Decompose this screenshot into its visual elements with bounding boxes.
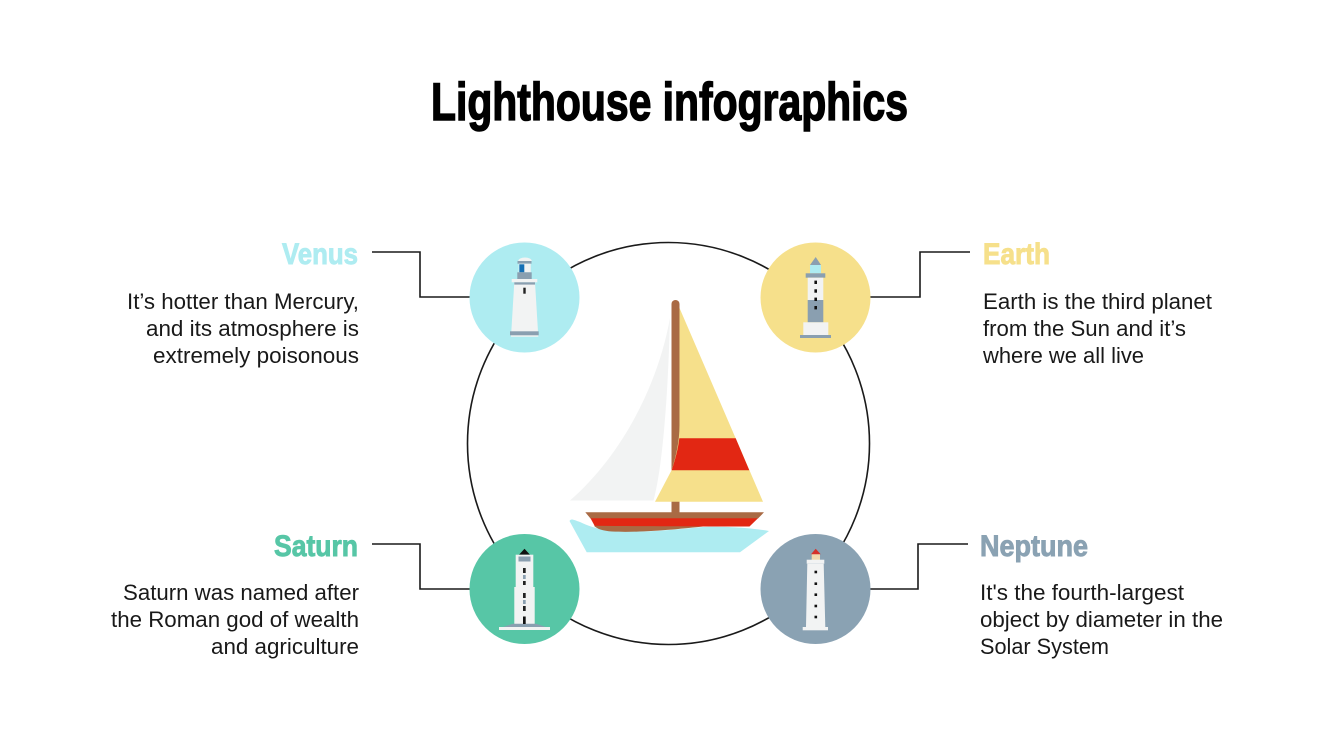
text block: Earth: from the Sun and it’s [983,316,1186,341]
text block: Neptune: Neptune [980,530,1088,563]
icon: Venus lighthouse [470,242,580,352]
connector: Venus [372,252,470,297]
text block: Saturn: Saturn [274,530,358,563]
text block: Neptune: object by diameter in the [980,607,1223,632]
mast [672,300,680,513]
connector: Earth [870,252,970,297]
red sail band [672,438,749,470]
title: Lighthouse infographics [431,73,908,132]
water [570,519,769,552]
text block: Earth: Earth [983,238,1050,271]
white sail [570,318,670,500]
yellow sail [655,308,763,502]
text block: Saturn: and agriculture [211,634,359,659]
icon: Earth lighthouse [760,242,870,352]
text block: Neptune [980,530,1223,659]
central ring [468,242,870,644]
hull [585,512,764,518]
icon: Saturn lighthouse [470,534,580,644]
hull keel [594,526,703,532]
connector: Neptune [870,544,968,589]
icon: sailboat [570,300,769,552]
text block: Earth: Earth is the third planet [983,289,1213,314]
text block: Venus: and its atmosphere is [146,316,359,341]
icon: Neptune lighthouse [760,534,870,644]
text block: Neptune: It's the fourth-largest [980,580,1185,605]
text block: Saturn: Saturn was named after [123,580,359,605]
text block: Venus: Venus [282,238,358,271]
text block: Venus [127,238,359,368]
hull stripe [590,518,758,526]
text block: Saturn [111,530,359,659]
text block: Venus: It’s hotter than Mercury, [127,289,359,314]
text block: Earth [982,238,1213,368]
connector: Saturn [372,544,470,589]
text block: Saturn: the Roman god of wealth [111,607,359,632]
text block: Venus: extremely poisonous [153,343,359,368]
text block: Earth: where we all live [982,343,1144,368]
text block: Neptune: Solar System [980,634,1109,659]
